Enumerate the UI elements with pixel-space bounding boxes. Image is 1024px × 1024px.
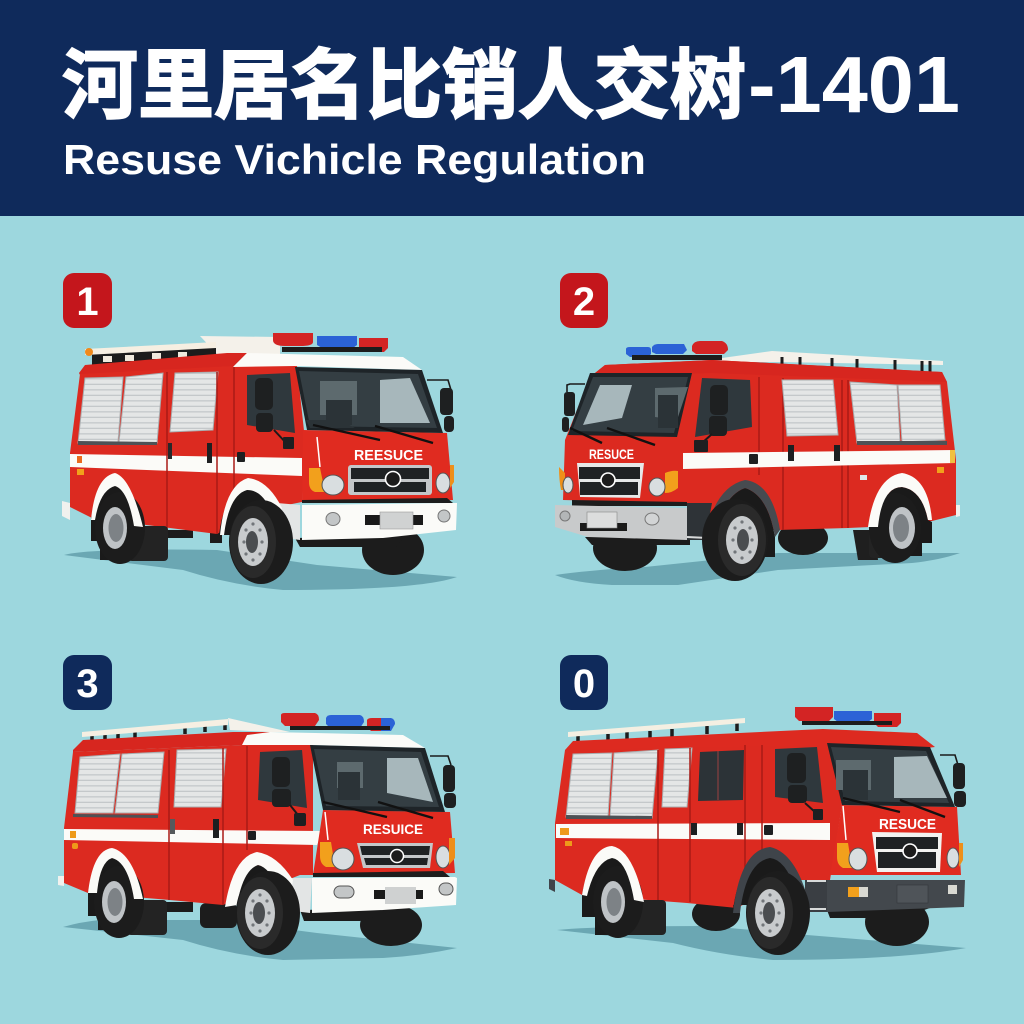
truck 1: REESUCE [354, 447, 423, 464]
truck 3: RESUICE [363, 822, 423, 837]
badge 1 [63, 273, 112, 328]
truck 4: RESUCE [879, 817, 936, 833]
badge 3: 3 [76, 662, 99, 706]
truck 1 [62, 333, 457, 590]
header band [0, 0, 1024, 216]
subtitle: Resuse Vichicle Regulation [63, 136, 646, 183]
truck 2: RESUCE [589, 446, 634, 462]
badge 1: 1 [76, 280, 99, 324]
title: 河里居名比销人交树 [62, 44, 746, 129]
badge 2 [560, 273, 608, 328]
badge 0 [560, 655, 608, 710]
truck 2 [555, 341, 960, 585]
title: -1401 [748, 40, 960, 129]
truck 4 [549, 707, 966, 960]
badge 2: 2 [573, 280, 595, 324]
badge 3 [63, 655, 112, 710]
truck 3 [58, 713, 457, 960]
badge 0: 0 [573, 662, 595, 706]
